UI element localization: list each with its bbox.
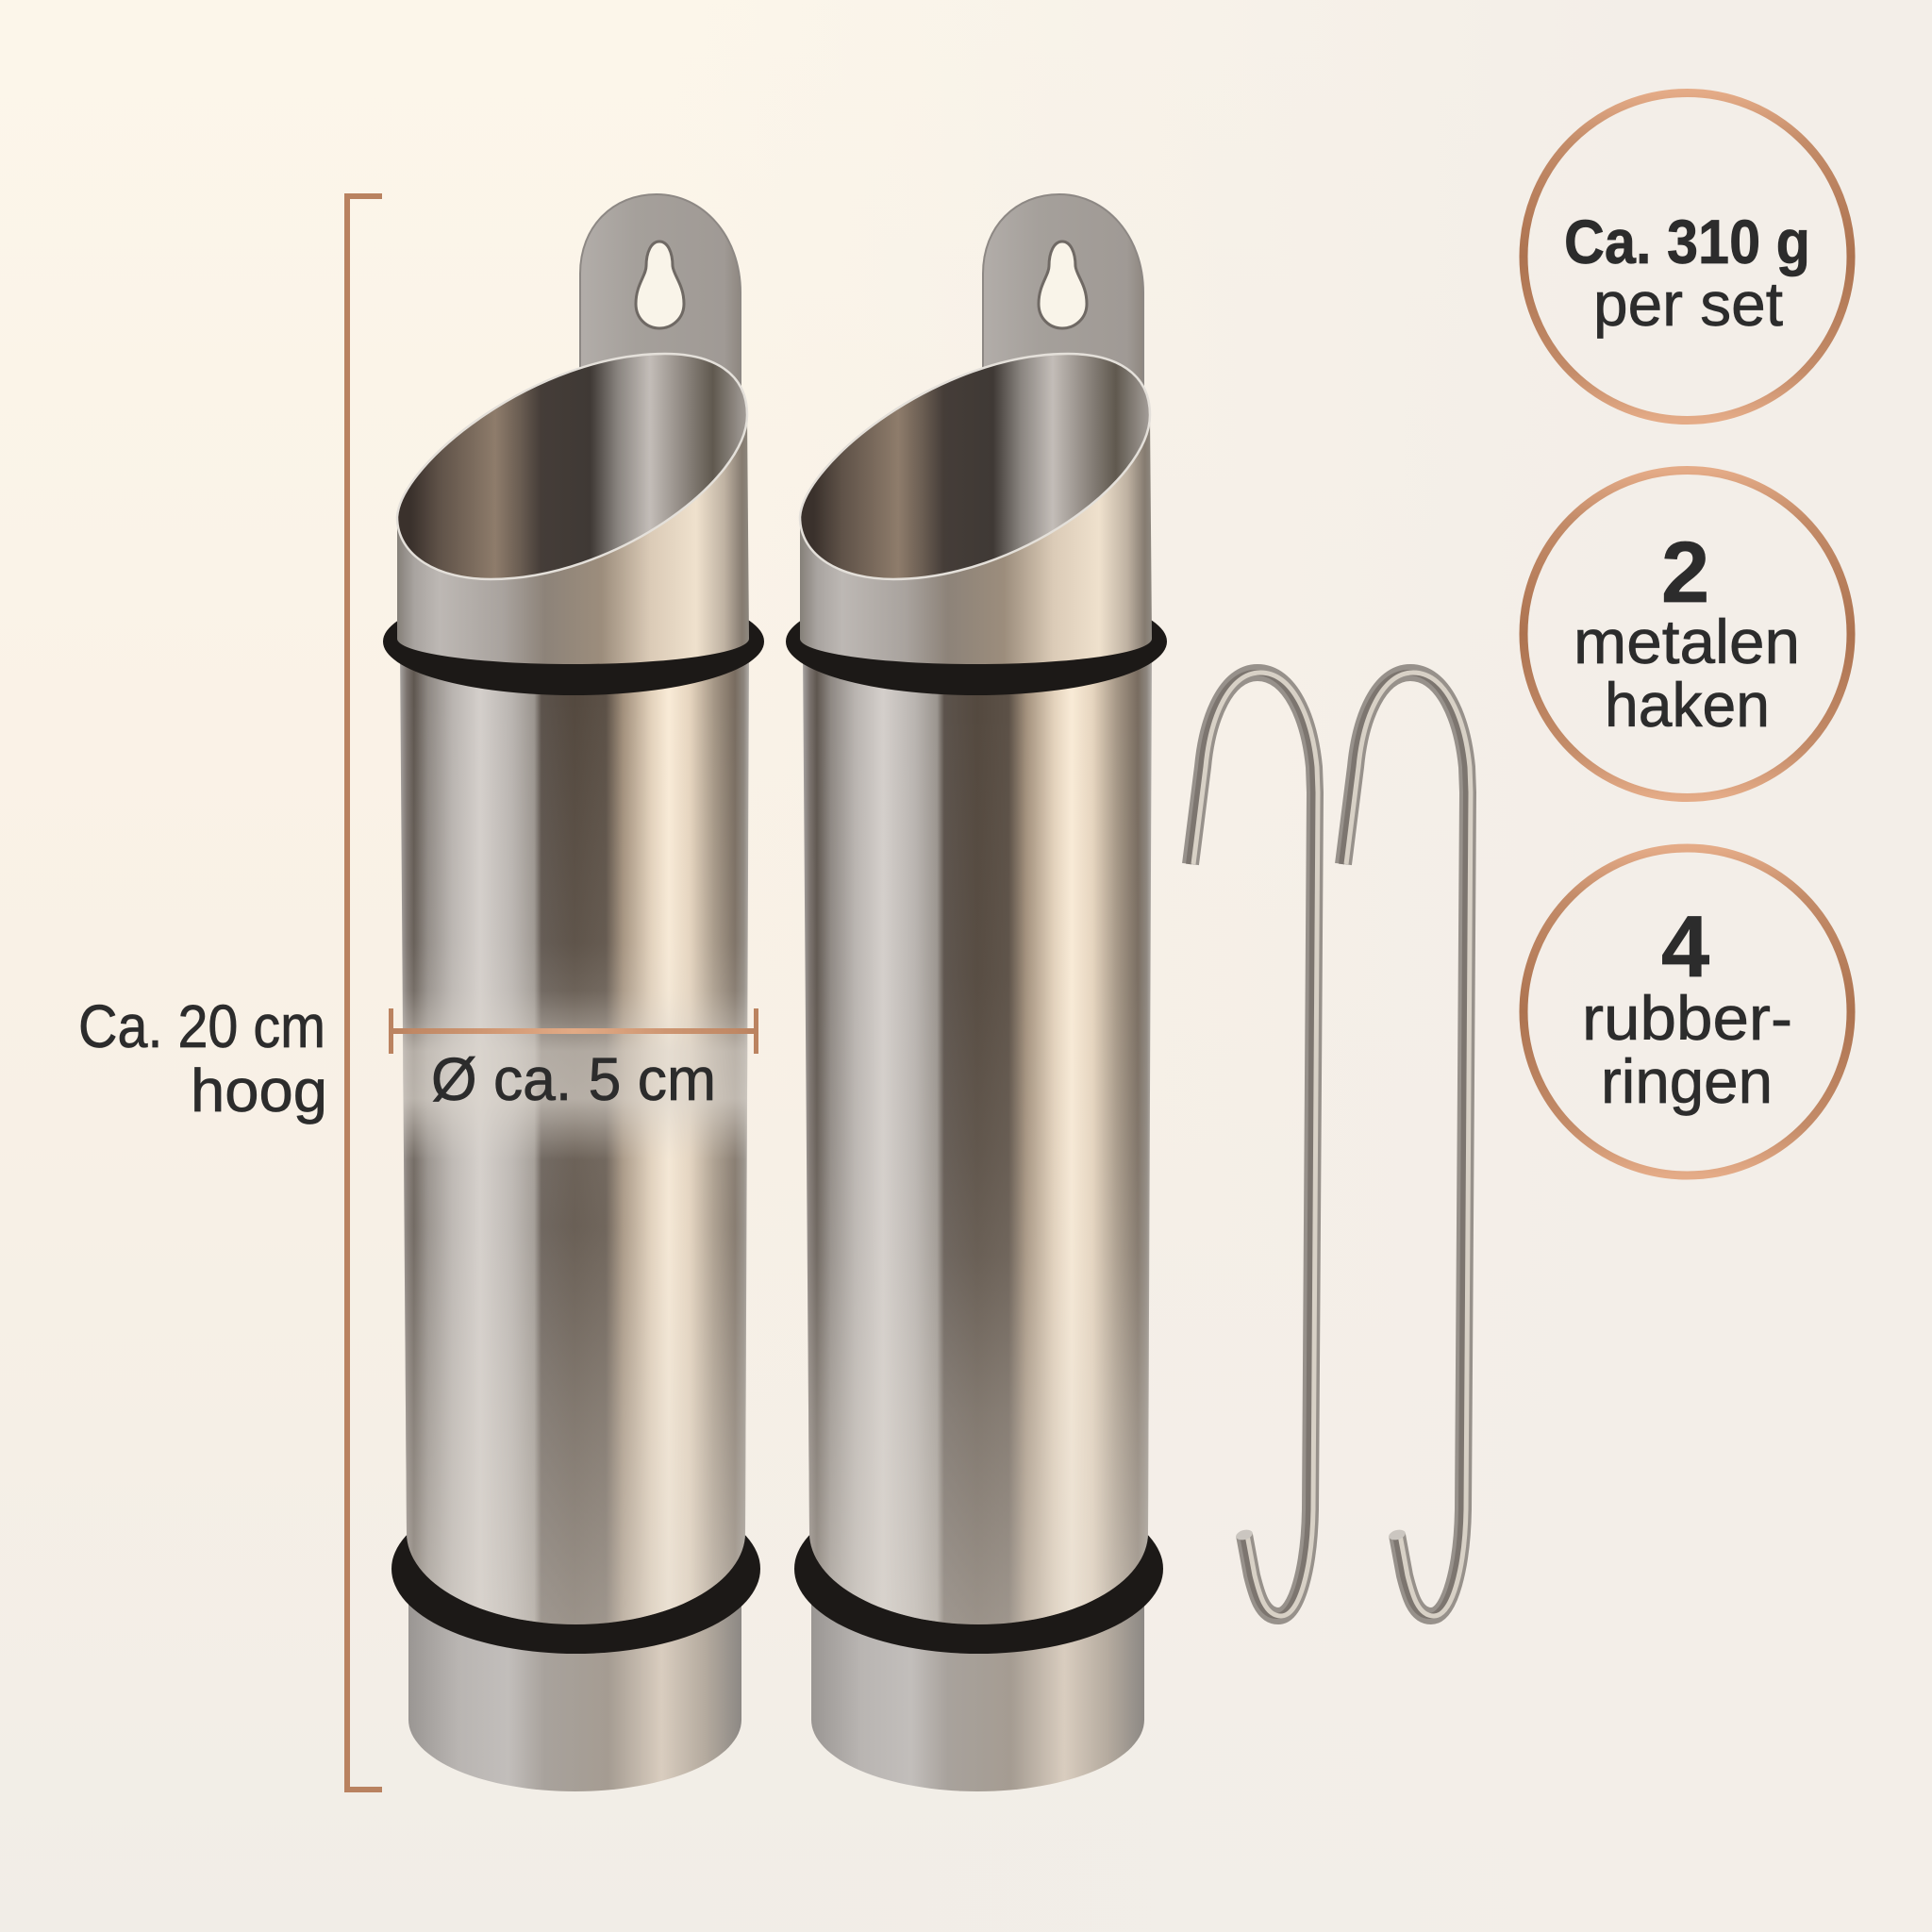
right metal tube holder with hanging tab and rubber rings <box>786 194 1167 1791</box>
label: height: Ca. 20 cm <box>78 992 325 1060</box>
badge: weight per set: per set <box>1593 269 1783 339</box>
badge: 2 metal hooks: haken <box>1605 670 1770 740</box>
label: height: hoog <box>191 1057 327 1124</box>
badge: 2 metal hooks: 2 <box>1661 525 1709 621</box>
badge: 2 metal hooks: metalen <box>1574 607 1800 676</box>
height dimension bracket <box>347 196 382 1790</box>
badge: weight per set <box>1524 92 1851 421</box>
badge: 4 rubber rings: 4 <box>1661 899 1709 995</box>
badge: weight per set: Ca. 310 g <box>1564 207 1810 276</box>
right metal S-hook <box>1341 673 1471 1616</box>
badge: 4 rubber rings: ringen <box>1601 1046 1773 1116</box>
label: diameter: Ø ca. 5 cm <box>431 1045 716 1113</box>
diameter dimension line <box>389 1008 758 1054</box>
badge: 4 rubber rings: rubber- <box>1582 983 1792 1053</box>
badge: 4 rubber rings <box>1524 848 1851 1175</box>
left metal S-hook <box>1189 673 1318 1616</box>
label: height <box>78 992 327 1124</box>
left metal tube holder with hanging tab and rubber rings <box>383 194 764 1791</box>
badge: 2 metal hooks <box>1524 470 1851 798</box>
